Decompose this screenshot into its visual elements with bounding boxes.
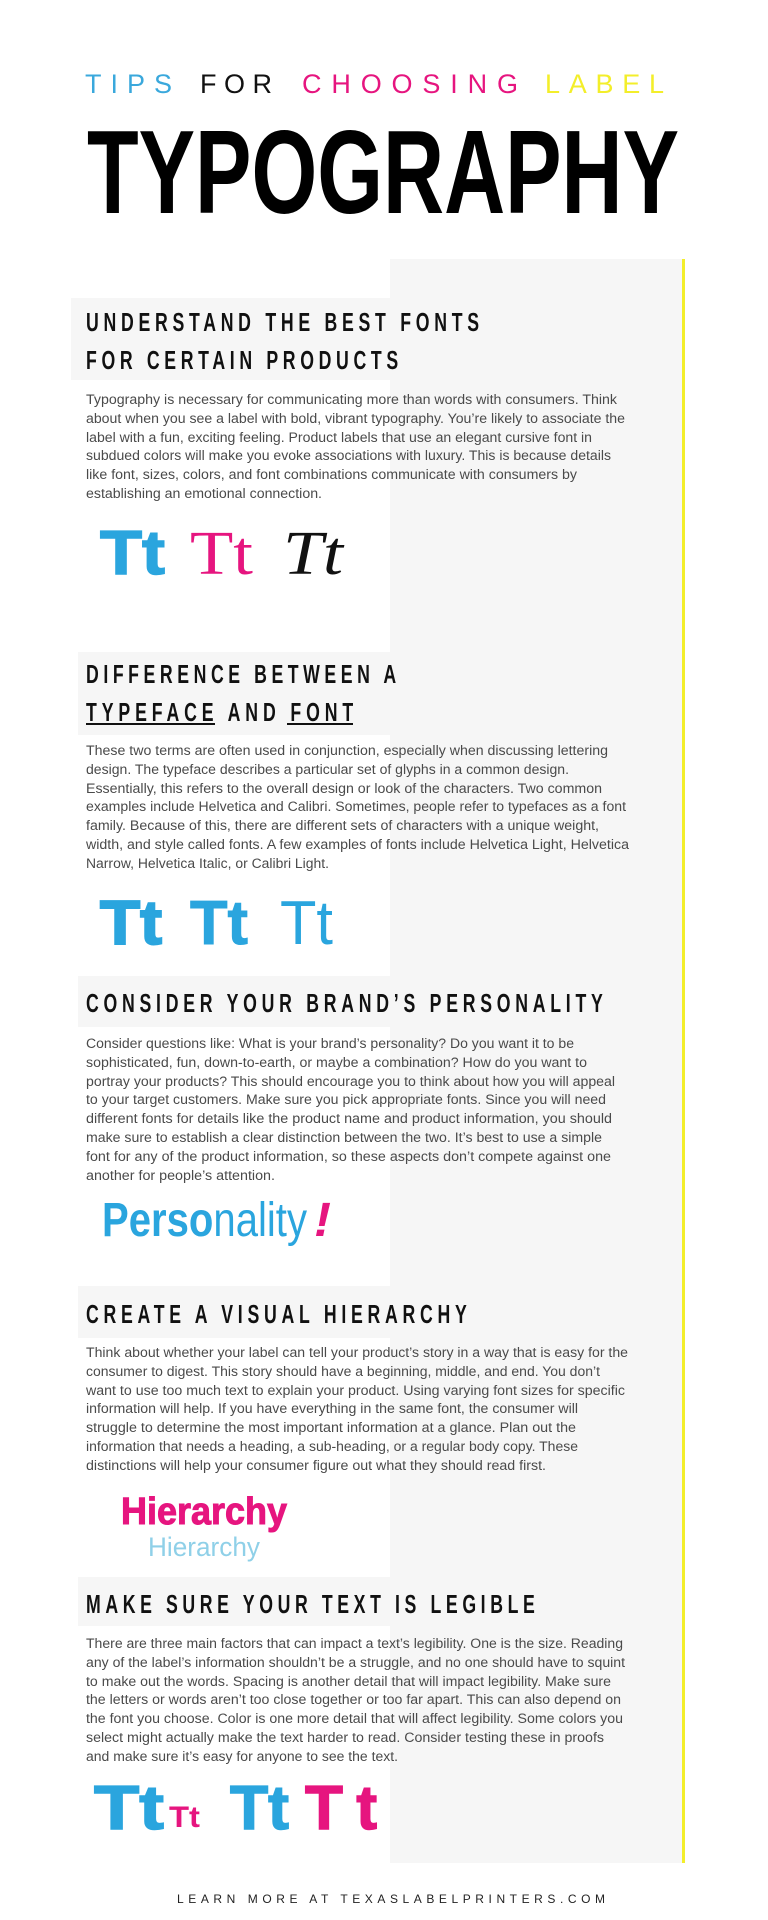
body 1: like font, sizes, colors, and font combinations communicate with consumers by <box>86 467 577 482</box>
body 2 <box>85 743 630 871</box>
icon: Tt legibility samples: T t <box>305 1774 377 1843</box>
body 3: make sure to establish a clear distinction between the two. It’s best to use a simple <box>86 1130 602 1145</box>
body 1 <box>86 392 625 501</box>
body 1: subdued colors will make you evoke associations with luxury. This is because details <box>86 448 611 463</box>
body 1: label with a fun, exciting feeling. Product labels that use an elegant cursive font in <box>86 430 592 445</box>
heading 1: UNDERSTAND THE BEST FONTS <box>86 308 479 337</box>
section 5 <box>78 1577 625 1843</box>
body 2: family. Because of this, there are different sets of characters with a unique weight, <box>86 818 599 833</box>
body 3: sophisticated, fun, down-to-earth, or maybe a combination? How do you want to <box>86 1055 587 1070</box>
icon: Tt font samples 1: Tt <box>283 520 345 588</box>
body 5: select might actually make the text harder to read. Consider testing these in proofs <box>86 1730 604 1745</box>
body 5: the font you choose. Color is one more detail that will affect legibility. Some colors you <box>86 1711 623 1726</box>
body 4: information that needs a heading, a sub-heading, or a regular body copy. These <box>86 1439 578 1454</box>
section 4 <box>78 1286 628 1562</box>
footer: LEARN MORE AT TEXASLABELPRINTERS.COM <box>177 1892 605 1906</box>
heading box 4 <box>78 1286 391 1338</box>
subtitle: CHOOSING <box>302 69 518 99</box>
icon: Hierarchy words: Hierarchy <box>148 1532 260 1562</box>
body 2: design. The typeface describes a particular set of glyphs in a common design. <box>86 762 569 777</box>
icon: Tt legibility samples: Tt <box>94 1774 164 1843</box>
icon: Personality word: ! <box>314 1194 331 1247</box>
icon: Tt font samples 2: Tt <box>100 889 162 958</box>
icon: Tt legibility samples: Tt <box>169 1801 200 1834</box>
body 2: Essentially, this refers to the overall design or look of the characters. Two common <box>86 781 602 796</box>
body 5 <box>86 1636 625 1764</box>
body 3: to your target customers. Make sure you pick appropriate fonts. Since you will need <box>86 1092 606 1107</box>
icon: Hierarchy words: Hierarchy <box>121 1491 287 1533</box>
heading 2 <box>86 660 396 727</box>
icon: Tt font samples 2: Tt <box>280 889 333 958</box>
body 4 <box>85 1345 628 1473</box>
body 3 <box>86 1036 615 1183</box>
icon: Personality word: Personality <box>102 1194 307 1247</box>
heading 1 <box>86 308 479 375</box>
body 5: the letters or words aren’t too close together or too far apart. This can also depend on <box>86 1692 621 1707</box>
body 4: struggle to determine the most important information at a glance. Plan out the <box>86 1420 576 1435</box>
body 4: want to use too much text to explain your product. Using varying font sizes for specific <box>85 1383 625 1398</box>
icon: Tt font samples 1: Tt <box>100 519 165 588</box>
body 1: establishing an emotional connection. <box>86 486 322 501</box>
heading 2: TYPEFACE AND FONT <box>86 698 354 727</box>
body 3: different fonts for details like the product name and product information, you should <box>86 1111 612 1126</box>
gray panel <box>390 259 683 1863</box>
subtitle: FOR <box>200 69 272 99</box>
heading 1: FOR CERTAIN PRODUCTS <box>86 346 398 375</box>
section 3 <box>78 976 615 1247</box>
yellow vertical line <box>682 259 685 1863</box>
icon: Hierarchy words <box>121 1491 287 1562</box>
body 3: another for people’s attention. <box>86 1168 275 1183</box>
body 5: There are three main factors that can impact a text’s legibility. One is the size. Reading <box>86 1636 623 1651</box>
section 2 <box>78 652 630 958</box>
body 3: font for any of the product information, so these aspects don’t compete against one <box>86 1149 611 1164</box>
body 5: any of the label’s information shouldn’t be a struggle, and no one should have to squint <box>86 1655 625 1670</box>
body 4: information will help. If you have everything in the same font, the consumer will <box>86 1401 578 1416</box>
subtitle <box>85 69 664 99</box>
heading 3: CONSIDER YOUR BRAND’S PERSONALITY <box>86 989 603 1018</box>
body 1: about when you see a label with bold, vibrant typography. You’re likely to associate the <box>86 411 625 426</box>
subtitle: TIPS <box>85 69 172 99</box>
heading 2: DIFFERENCE BETWEEN A <box>86 660 396 689</box>
body 2: Narrow, Helvetica Italic, or Calibri Light. <box>86 856 329 871</box>
icon: Tt legibility samples <box>94 1774 377 1843</box>
heading box 2 <box>78 652 391 735</box>
body 5: to make out the words. Spacing is another detail that will impact legibility. Make sure <box>86 1674 611 1689</box>
heading box 3 <box>78 976 391 1027</box>
icon: Tt font samples 2 <box>100 889 333 958</box>
body 2: width, and style called fonts. A few examples of fonts include Helvetica Light, Helvetica <box>85 837 630 852</box>
heading box 1 <box>71 298 391 380</box>
body 2: These two terms are often used in conjunction, especially when discussing lettering <box>86 743 608 758</box>
subtitle: LABEL <box>545 69 664 99</box>
body 3: portray your products? This should encourage you to think about how you will appeal <box>86 1074 615 1089</box>
icon: Tt font samples 1: Tt <box>190 520 253 588</box>
body 1: Typography is necessary for communicating more than words with consumers. Think <box>86 392 617 407</box>
body 4: distinctions will help your consumer figure out what they should read first. <box>86 1458 546 1473</box>
section 1 <box>71 298 625 588</box>
body 4: consumer to digest. This story should have a beginning, middle, and end. You don’t <box>86 1364 600 1379</box>
heading box 5 <box>78 1577 391 1626</box>
heading 4: CREATE A VISUAL HIERARCHY <box>86 1300 467 1329</box>
heading 5: MAKE SURE YOUR TEXT IS LEGIBLE <box>86 1590 535 1619</box>
icon: Tt legibility samples: Tt <box>230 1774 289 1843</box>
icon: Tt font samples 2: Tt <box>190 889 248 958</box>
icon: Tt font samples 1 <box>100 519 345 588</box>
body 3: Consider questions like: What is your brand’s personality? Do you want it to be <box>86 1036 574 1051</box>
body 2: examples include Helvetica and Calibri. Sometimes, people refer to typefaces as a font <box>86 799 626 814</box>
body 4: Think about whether your label can tell your product’s story in a way that is easy for the <box>86 1345 628 1360</box>
body 5: and make sure it’s easy for anyone to see the text. <box>86 1749 398 1764</box>
